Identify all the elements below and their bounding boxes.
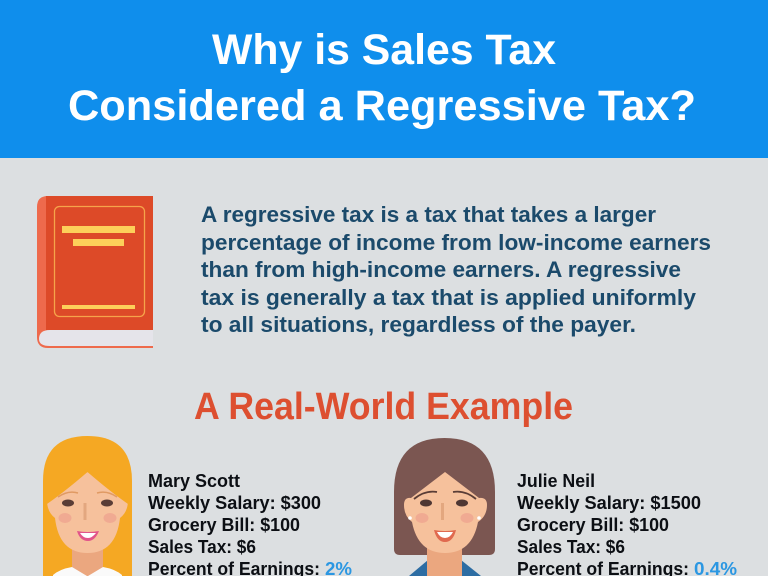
title: Why is Sales Tax (212, 26, 556, 74)
profile text: Julie Neil: Weekly Salary: $1500 (517, 493, 701, 513)
profile text: Mary Scott: Grocery Bill: $100 (148, 515, 300, 535)
profile text: Mary Scott (148, 471, 352, 576)
profile text: Mary Scott: Mary Scott (148, 471, 240, 491)
title: Considered a Regressive Tax? (68, 82, 696, 130)
profile text: Julie Neil: Grocery Bill: $100 (517, 515, 669, 535)
profile text: Julie Neil: Julie Neil (517, 471, 595, 491)
portrait: Mary Scott (43, 436, 132, 576)
icon: red book (37, 196, 153, 348)
definition paragraph: tax is generally a tax that is applied uniformly (201, 285, 696, 310)
portrait: Julie Neil (394, 438, 495, 576)
profile text: Mary Scott: Weekly Salary: $300 (148, 493, 321, 513)
profile text: Julie Neil (517, 471, 737, 576)
definition paragraph: percentage of income from low-income earners (201, 230, 711, 255)
definition paragraph: to all situations, regardless of the payer. (201, 312, 636, 337)
definition paragraph: A regressive tax is a tax that takes a larger (201, 202, 656, 227)
header banner (0, 0, 768, 158)
profile text: Julie Neil: Sales Tax: $6 (517, 537, 625, 557)
definition paragraph (201, 202, 711, 337)
profile text: Mary Scott: Sales Tax: $6 (148, 537, 256, 557)
section heading: A Real-World Example (194, 386, 573, 428)
title (68, 26, 696, 130)
definition paragraph: than from high-income earners. A regressive (201, 257, 681, 282)
